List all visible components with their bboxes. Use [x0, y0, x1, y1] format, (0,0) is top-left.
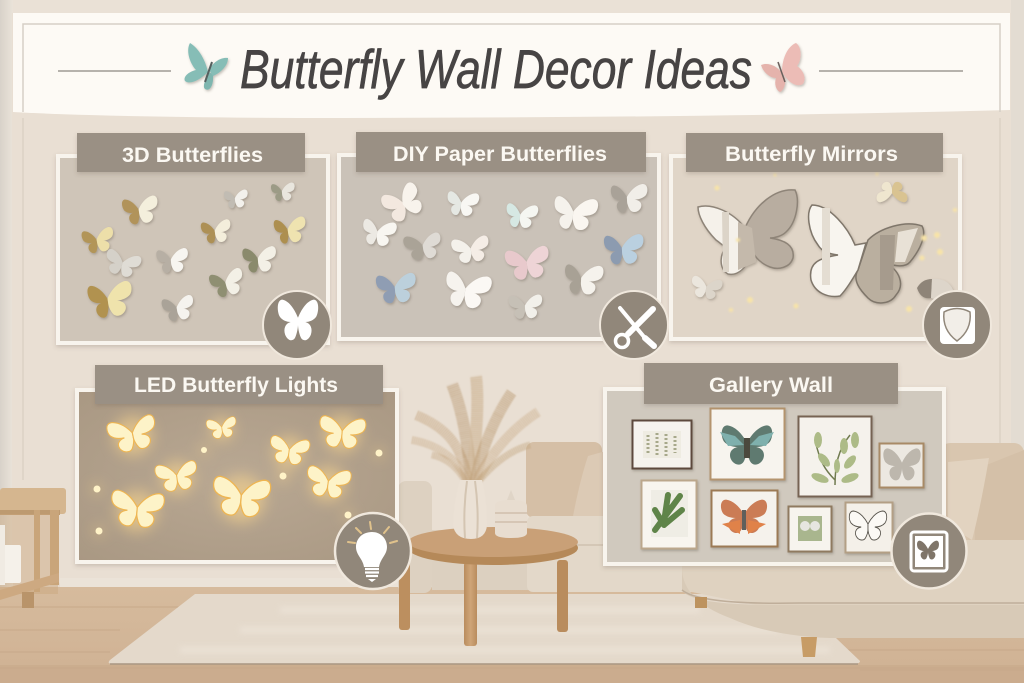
icon: pink butterfly: [761, 43, 805, 92]
icon: light bulb badge: [335, 513, 411, 589]
butterflies: gold, silver, green: [81, 182, 308, 323]
side table: [0, 488, 66, 608]
frame: small green print: [788, 506, 832, 552]
frame: fern: [642, 480, 696, 548]
star lights: [94, 447, 382, 534]
heading: Gallery Wall: [709, 374, 833, 397]
framed art: [632, 408, 924, 552]
paper butterflies: [361, 177, 648, 319]
heading: [644, 363, 898, 404]
left mirror butterfly: [698, 190, 797, 274]
frame: orange butterfly: [712, 490, 778, 546]
title banner: [13, 13, 1010, 118]
heading: Butterfly Mirrors: [725, 143, 898, 166]
coffee table: [399, 527, 578, 646]
small mirror butterflies: [689, 182, 953, 301]
small jar: [495, 500, 527, 538]
icon: framed butterfly badge: [892, 514, 966, 588]
vase with pampas grass: [412, 376, 538, 539]
sofa: [398, 442, 1024, 657]
icon: mirror badge: [923, 291, 991, 359]
wood floor: [0, 587, 1024, 683]
heading: [356, 132, 646, 172]
icon: teal butterfly: [185, 43, 228, 90]
glowing butterflies: [106, 414, 366, 529]
fairy lights: [714, 172, 957, 312]
heading: [95, 365, 383, 404]
panel: LED Butterfly Lights: [77, 365, 397, 562]
pampas plumes: [412, 376, 538, 482]
frame: teal butterfly: [710, 408, 784, 480]
frame: line butterfly: [846, 502, 892, 552]
glow halos: [92, 415, 384, 536]
icon: scissors badge: [600, 291, 668, 359]
panel: Butterfly Mirrors: [671, 133, 960, 339]
frame: grey butterfly: [880, 444, 924, 488]
heading: 3D Butterflies: [122, 144, 263, 167]
icon: butterfly badge: [263, 291, 331, 359]
panel: 3D Butterflies: [58, 133, 328, 343]
heading: [686, 133, 943, 172]
heading: [77, 133, 305, 172]
panel: Gallery Wall: [605, 363, 944, 564]
frame: botanical sketch: [632, 420, 692, 468]
vase: [453, 480, 487, 539]
rug: [109, 594, 860, 664]
right mirror butterfly: [809, 205, 924, 303]
heading: LED Butterfly Lights: [134, 374, 338, 397]
panel: DIY Paper Butterflies: [339, 132, 659, 339]
title text: Butterfly Wall Decor Ideas: [240, 38, 752, 100]
heading: DIY Paper Butterflies: [393, 143, 607, 166]
frame: green leaves: [798, 416, 872, 496]
